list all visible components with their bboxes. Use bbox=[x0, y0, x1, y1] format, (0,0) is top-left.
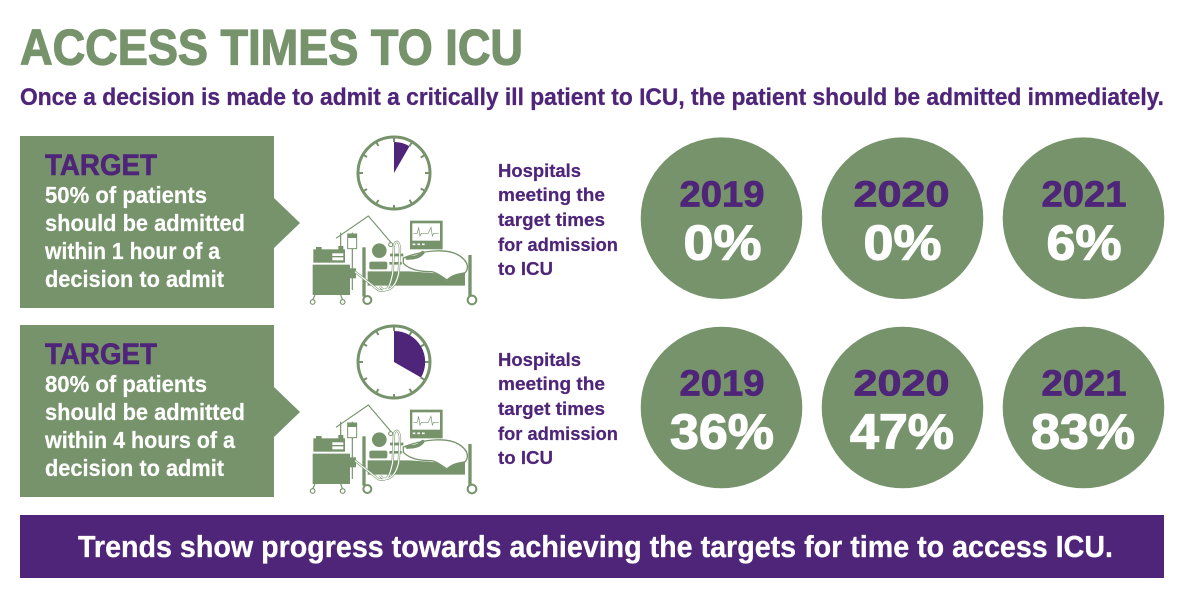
stat: 2020 47%: 47% bbox=[850, 406, 954, 460]
stat: 2021 83%: 83% bbox=[1031, 406, 1135, 460]
text: hospitals meeting target: Hospitals bbox=[498, 161, 581, 181]
target description bbox=[44, 182, 245, 292]
target description: within 4 hours of a bbox=[44, 427, 235, 453]
text: hospitals meeting target: meeting the bbox=[498, 185, 605, 205]
text: hospitals meeting target: target times bbox=[498, 399, 605, 419]
icon: patient in ICU bed bbox=[310, 216, 476, 304]
stat: 2019 36%: 2019 bbox=[680, 362, 764, 404]
target description: within 1 hour of a bbox=[44, 238, 220, 264]
banner: conclusion bbox=[20, 515, 1164, 578]
target description: 80% of patients bbox=[45, 371, 207, 397]
text: hospitals meeting target bbox=[498, 161, 618, 279]
stat: 2021 6%: 2021 bbox=[1042, 174, 1126, 214]
target heading: TARGET bbox=[45, 149, 157, 182]
panel: 4 hour target bbox=[20, 325, 300, 497]
text: hospitals meeting target: to ICU bbox=[498, 448, 553, 468]
target arrow box bbox=[20, 136, 300, 308]
stat: 2019 0%: 0% bbox=[684, 216, 762, 270]
stat: 2020 0% bbox=[822, 137, 983, 299]
icon: patient in ICU bed bbox=[310, 405, 476, 493]
target description: decision to admit bbox=[45, 455, 224, 481]
stat: 2021 83% bbox=[1003, 327, 1164, 488]
stat: 2021 6%: 6% bbox=[1046, 216, 1122, 270]
target heading: TARGET bbox=[45, 338, 157, 371]
text: hospitals meeting target: for admission bbox=[498, 235, 618, 255]
icon: clock showing 1 hour bbox=[358, 137, 430, 210]
target description: 50% of patients bbox=[45, 182, 207, 208]
target description: should be admitted bbox=[45, 210, 245, 236]
stat: 2020 47% bbox=[822, 327, 983, 488]
subtitle: Once a decision is made to admit a critically ill patient to ICU, the patient should be admitted immediately. bbox=[20, 84, 1164, 111]
target description: decision to admit bbox=[45, 266, 224, 292]
stat: 2021 83%: 2021 bbox=[1042, 362, 1126, 404]
icon: clock showing 4 hours bbox=[358, 326, 430, 399]
stat: 2020 0%: 2020 bbox=[854, 174, 950, 214]
title: ACCESS TIMES TO ICU bbox=[20, 20, 523, 76]
text: hospitals meeting target: meeting the bbox=[498, 374, 605, 394]
text: hospitals meeting target bbox=[498, 350, 618, 468]
target arrow box bbox=[20, 325, 300, 497]
target description bbox=[44, 371, 245, 481]
stat: 2019 36%: 36% bbox=[670, 406, 774, 460]
stat: 2020 47%: 2020 bbox=[854, 362, 950, 404]
panel: 1 hour target bbox=[20, 136, 300, 308]
stat: 2019 36% bbox=[641, 327, 802, 488]
text: hospitals meeting target: for admission bbox=[498, 424, 618, 444]
text: hospitals meeting target: target times bbox=[498, 210, 605, 230]
stat: 2020 0%: 0% bbox=[864, 216, 942, 270]
text: hospitals meeting target: to ICU bbox=[498, 259, 553, 279]
text: hospitals meeting target: Hospitals bbox=[498, 350, 581, 370]
stat: 2019 0% bbox=[641, 137, 802, 299]
stat: 2021 6% bbox=[1003, 137, 1164, 299]
target description: should be admitted bbox=[45, 399, 245, 425]
banner: conclusion: Trends show progress towards achieving the targets for time to access ICU. bbox=[78, 529, 1113, 564]
stat: 2019 0%: 2019 bbox=[680, 174, 764, 214]
